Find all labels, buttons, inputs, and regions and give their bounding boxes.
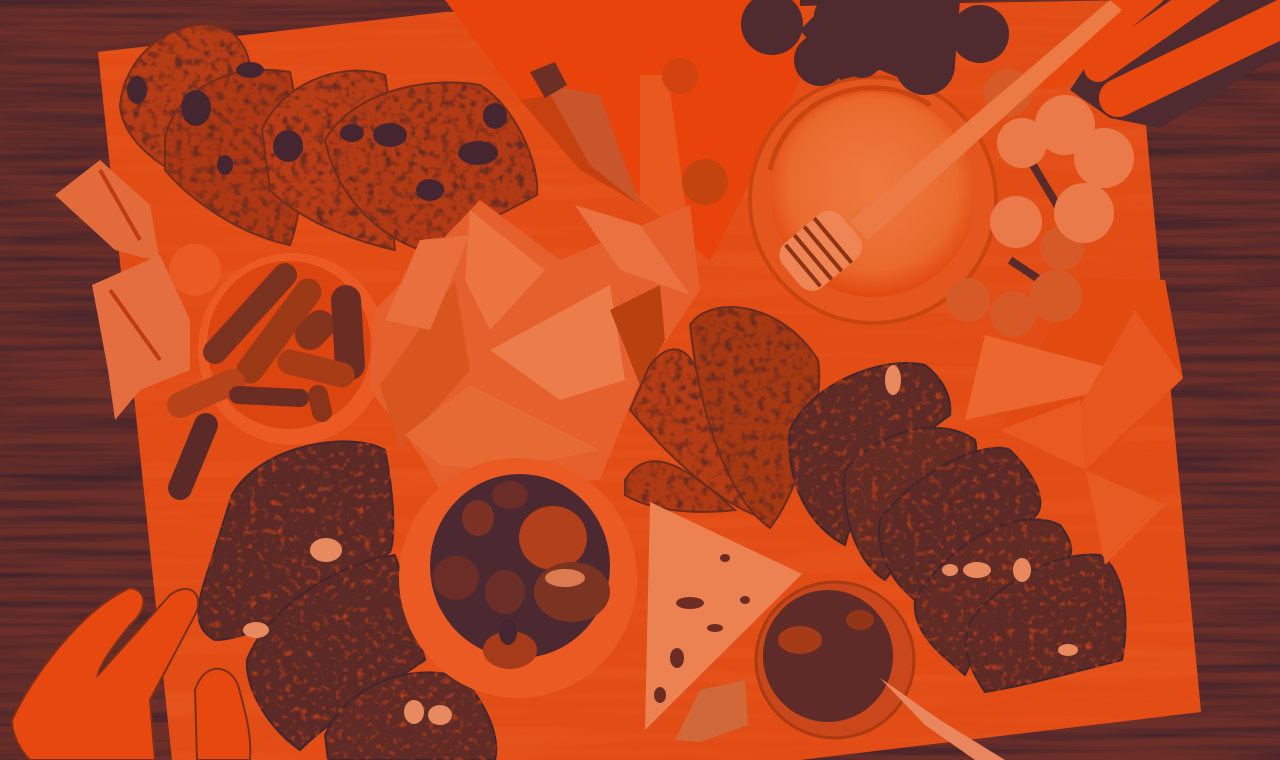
bread almonds right <box>885 365 1078 656</box>
wooden honey dipper <box>773 0 1122 297</box>
prosciutto slices <box>370 200 700 490</box>
cheese wedge: top <box>445 0 800 262</box>
jam jar with spoon <box>756 582 1005 760</box>
bread loaf slices: top left <box>120 25 537 250</box>
hand: bottom left <box>12 588 250 760</box>
gherkins <box>180 275 350 488</box>
hand: top right <box>1052 0 1280 128</box>
salami slices <box>625 307 819 528</box>
dark bread slices: lower left <box>198 441 496 760</box>
honey jar <box>750 77 996 323</box>
cheese wedges right <box>965 278 1183 565</box>
bowl of dates <box>399 458 637 698</box>
crumpled paper left <box>55 160 221 420</box>
dark bread almonds <box>243 538 452 725</box>
dark bread slices: lower right <box>789 363 1126 692</box>
bowl of gherkins <box>180 253 386 488</box>
dark grapes top <box>741 0 1009 95</box>
light grapes right <box>946 69 1134 337</box>
blue cheese wedge <box>645 502 802 742</box>
bread loaf fruit spots <box>127 62 507 201</box>
